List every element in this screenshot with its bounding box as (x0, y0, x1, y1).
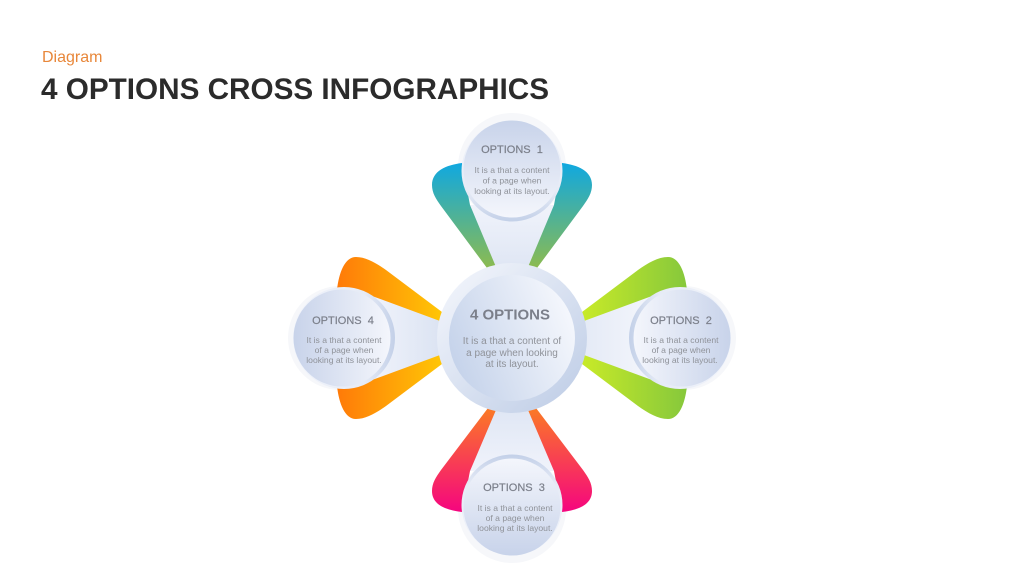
petals: option 3 (432, 408, 592, 512)
subtitle: Diagram (42, 49, 102, 66)
title: 4 OPTIONS CROSS INFOGRAPHICS (41, 73, 549, 106)
stem: bottom (470, 408, 554, 471)
option 4 circle: of a page when (315, 345, 374, 355)
option 3 circle: of a page when (486, 513, 545, 523)
halo: option 4 (288, 286, 392, 390)
option 2 circle: OPTIONS 2 (650, 315, 712, 327)
option 2 circle: looking at its layout. (642, 355, 718, 365)
halo: option 1 (458, 113, 566, 221)
center circle: 4 OPTIONS (470, 306, 550, 324)
stem: left (372, 296, 442, 380)
option 4 circle: OPTIONS 4 (312, 315, 374, 327)
center circle: a page when looking (466, 348, 558, 359)
option 4 circle (293, 287, 395, 389)
stem: right (582, 296, 652, 380)
option 3 circle (462, 454, 562, 556)
petals: option 4 (337, 257, 442, 419)
center circle (437, 263, 587, 413)
option 1 circle: It is a that a content (474, 165, 550, 175)
center circle: It is a that a content of (463, 336, 561, 347)
option 1 circle: OPTIONS 1 (481, 144, 543, 156)
option 2 circle: It is a that a content (643, 335, 719, 345)
option 4 circle: It is a that a content (306, 335, 382, 345)
option 1 circle: looking at its layout. (474, 186, 550, 196)
option 3 circle: looking at its layout. (477, 523, 553, 533)
option 1 circle (462, 120, 562, 222)
option 3 circle: OPTIONS 3 (483, 482, 545, 494)
option 3 circle: It is a that a content (477, 503, 553, 513)
option 1 circle: of a page when (483, 176, 542, 186)
halo: option 3 (458, 455, 566, 563)
option 4 circle: looking at its layout. (306, 355, 382, 365)
petals: option 2 (582, 257, 687, 419)
petals: option 1 (432, 163, 592, 268)
stem: top (470, 205, 554, 268)
option 2 circle: of a page when (652, 345, 711, 355)
halo: option 2 (632, 286, 736, 390)
center circle: at its layout. (485, 359, 539, 370)
option 2 circle (629, 287, 731, 389)
